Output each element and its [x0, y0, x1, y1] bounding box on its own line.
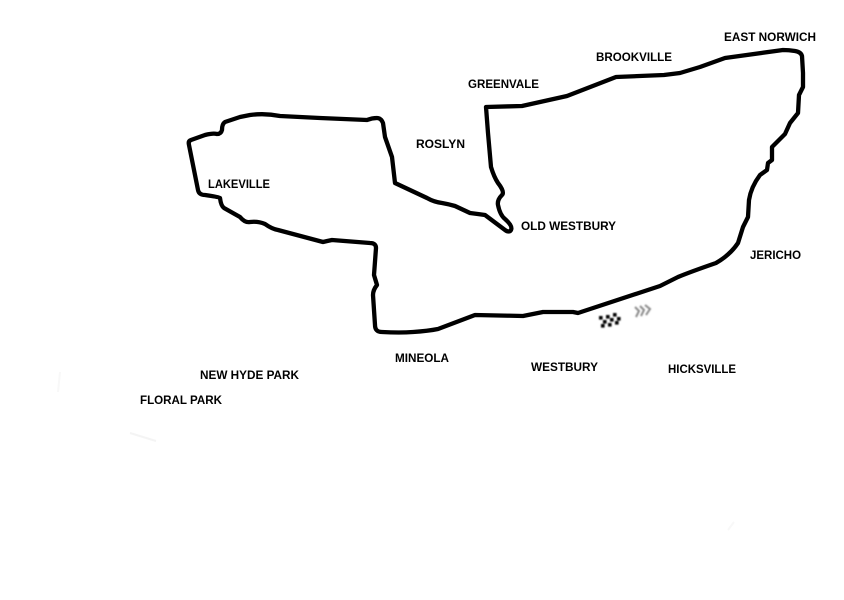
label: Brookville: BROOKVILLE — [596, 50, 672, 64]
label: Roslyn: ROSLYN — [416, 137, 465, 151]
label: East Norwich: EAST NORWICH — [724, 30, 816, 44]
label: Floral Park: FLORAL PARK — [140, 393, 222, 407]
label: Mineola: MINEOLA — [395, 351, 449, 365]
icon: direction chevrons — [635, 305, 650, 317]
label: New Hyde Park: NEW HYDE PARK — [200, 368, 299, 382]
track outline — [189, 50, 803, 332]
label: Jericho: JERICHO — [750, 248, 801, 262]
label: Lakeville: LAKEVILLE — [208, 177, 270, 191]
icon: checkered start flag — [599, 313, 621, 328]
label: Old Westbury: OLD WESTBURY — [521, 219, 616, 233]
label: Westbury: WESTBURY — [531, 360, 598, 374]
label: Hicksville: HICKSVILLE — [668, 362, 736, 376]
label: Greenvale: GREENVALE — [468, 77, 539, 91]
